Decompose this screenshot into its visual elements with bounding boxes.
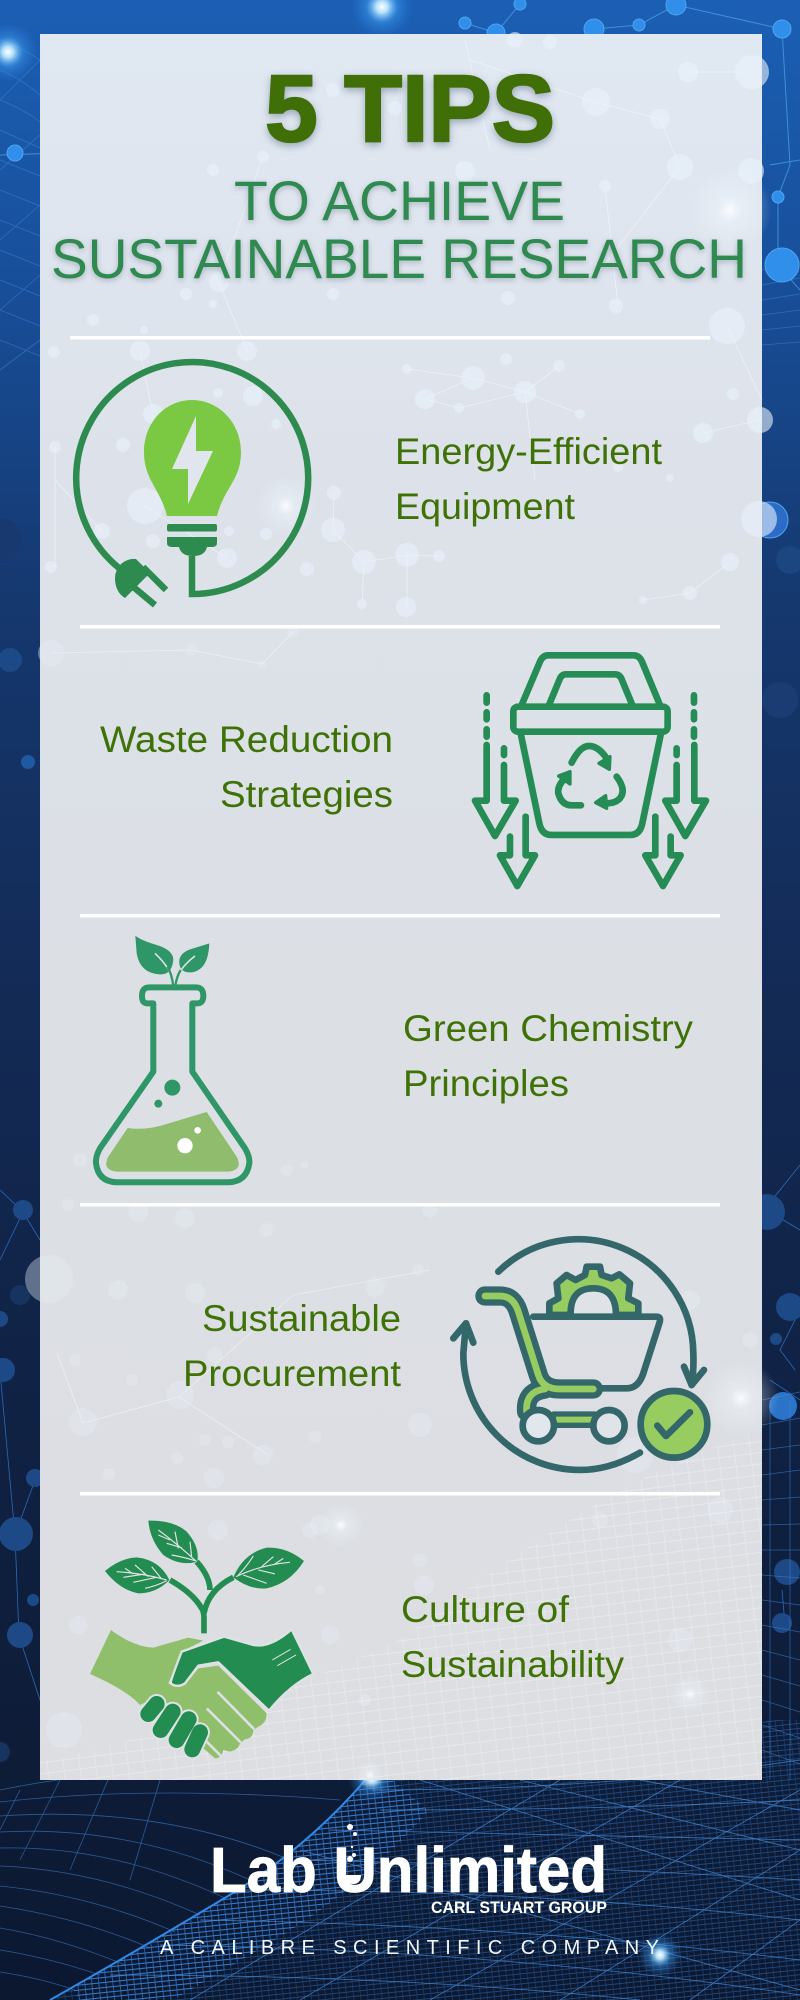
label: energy efficient equipment: Equipment: [395, 486, 576, 527]
label: waste reduction strategies: Strategies: [220, 774, 393, 815]
mesh lines: lower left background: [0, 1770, 340, 1990]
label: green chemistry principles: Green Chemistry: [403, 1008, 694, 1049]
mesh: dense band along wave crest: [85, 1788, 402, 2000]
mesh lines: right background: [762, 1392, 800, 1780]
label: culture of sustainability: [401, 1589, 625, 1685]
label: culture of sustainability: Sustainability: [401, 1644, 625, 1685]
logo: test tube bubbles: [345, 1824, 361, 1884]
mesh: bottom wave: [0, 1720, 800, 2000]
heading: subtitle: SUSTAINABLE RESEARCH: [51, 227, 747, 290]
mesh lines: upper background: [0, 40, 800, 370]
icon: green chemistry flask: [96, 936, 249, 1182]
icon: energy efficient light bulb with cord: [76, 362, 308, 605]
icon: recycling bin with arrows: [475, 655, 706, 886]
label: waste reduction strategies: [100, 719, 393, 815]
heading: subtitle: [51, 169, 747, 290]
divider rules: [70, 336, 720, 1496]
icon: handshake with growing plant: [90, 1521, 313, 1758]
logo: lab unlimited: Lab Unlimited: [210, 1834, 607, 1906]
heading: subtitle: TO ACHIEVE: [234, 169, 565, 232]
label: sustainable procurement: [183, 1298, 402, 1394]
label: sustainable procurement: Sustainable: [202, 1298, 401, 1339]
network: upper background: [0, 0, 800, 538]
label: energy efficient equipment: Energy-Efficient: [395, 431, 663, 472]
network: side nodes: [0, 518, 800, 1762]
label: culture of sustainability: Culture of: [401, 1589, 570, 1630]
label: sustainable procurement: Procurement: [183, 1353, 402, 1394]
mesh lines: wave outline: [50, 1760, 800, 2000]
label: green chemistry principles: Principles: [403, 1063, 569, 1104]
logo: lab unlimited: CARL STUART GROUP: [431, 1898, 607, 1917]
tagline: A CALIBRE SCIENTIFIC COMPANY: [160, 1937, 659, 1959]
heading: 5 tips: 5 TIPS: [265, 56, 555, 162]
label: waste reduction strategies: Waste Reduction: [100, 719, 393, 760]
icon: shopping cart with gear and checkmark: [453, 1239, 707, 1470]
label: green chemistry principles: [403, 1008, 694, 1104]
label: energy efficient equipment: [395, 431, 663, 527]
